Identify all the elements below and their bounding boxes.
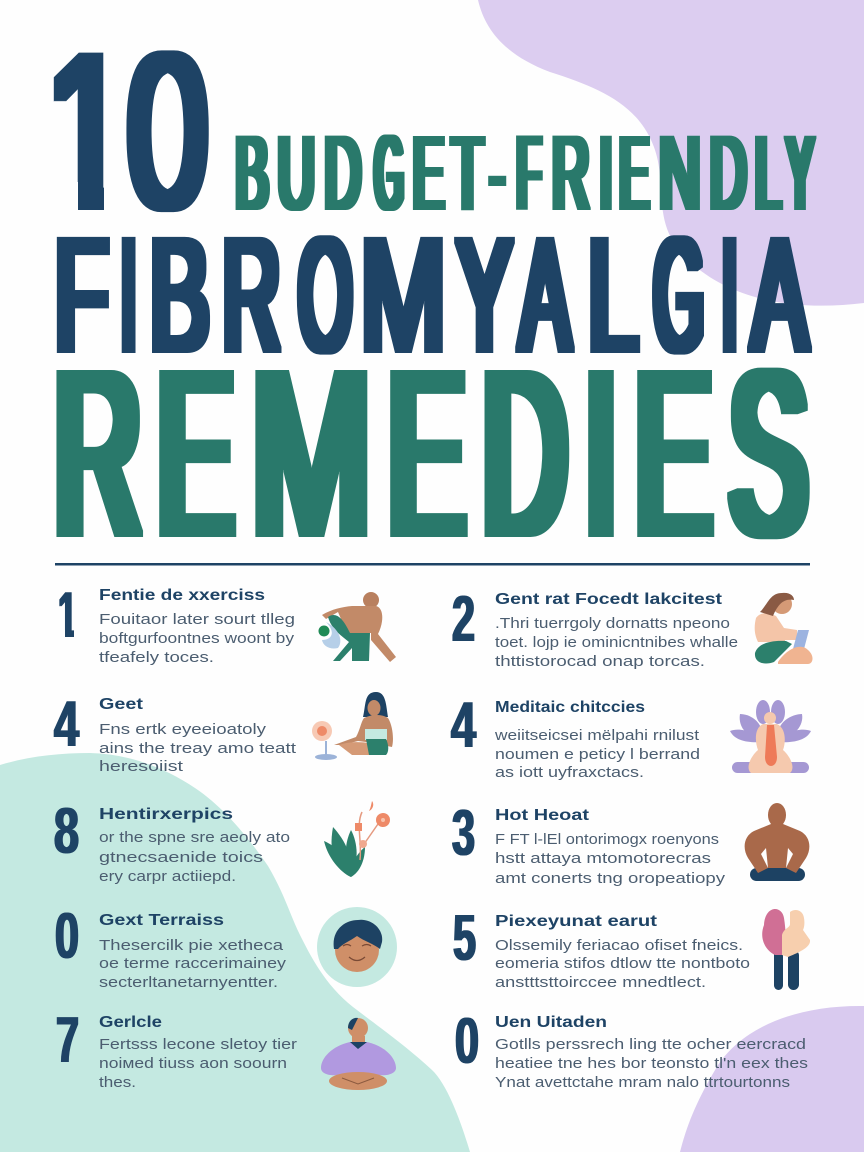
title: remedies: M <box>252 322 371 584</box>
body text: weiitseicsei mëlpahi rnilust <box>494 727 700 744</box>
body text: noiмed tiuss aon soourn <box>99 1055 287 1072</box>
panel: item 3 left <box>54 794 390 885</box>
body text: Gotlls perssrech ling tte ocher eercracd <box>495 1036 806 1053</box>
body text: toet. lojp ie ominicntnibes whalle <box>495 634 738 651</box>
title: remedies: E <box>158 322 233 584</box>
panel: item 5 right <box>455 1004 808 1091</box>
body text: Fns ertk eyeeioatoly <box>99 721 267 738</box>
body text: .Thri tuerrgoly dornatts npeono <box>495 615 730 632</box>
title: fibromyalgia: B <box>150 205 210 384</box>
body text <box>495 937 750 991</box>
number 4: 4 <box>451 688 476 761</box>
icon: seated meditating person <box>321 1018 396 1090</box>
title: remedies: E <box>636 322 711 584</box>
body text: anstttsttoirccee mnedtlect. <box>495 974 706 991</box>
title: fibromyalgia: G <box>654 205 704 384</box>
title: budget-friendly: L <box>755 115 781 232</box>
background blob: purple top right <box>478 0 864 306</box>
number 2: 2 <box>452 582 475 655</box>
body text <box>495 1036 808 1091</box>
number 0: 0 <box>455 1004 479 1077</box>
body text: thes. <box>99 1074 136 1091</box>
title: budget-friendly: I <box>600 115 612 232</box>
icon: woman with heat lamp <box>312 692 393 760</box>
body text: as iott uyfraxctacs. <box>495 764 644 781</box>
body text <box>495 831 726 887</box>
panel: item 4 right <box>453 901 810 991</box>
panel: item 1 right <box>452 582 813 670</box>
panel: item 2 right <box>451 688 811 781</box>
body text: Olssemily feriacao ofiset fneics. <box>495 937 743 954</box>
number 1: 1 <box>58 578 77 651</box>
icon: plant with flowers <box>324 801 390 877</box>
body text: ery carpr actiiepd. <box>99 868 236 885</box>
title: budget-friendly: T <box>452 115 483 232</box>
heading: Gext Terraiss <box>99 912 224 929</box>
heading: Uen Uitaden <box>495 1014 607 1031</box>
body text: F FT l-lEl ontorimogx roenyons <box>495 831 719 848</box>
body text <box>99 829 290 885</box>
heading: Hot Heoat <box>495 807 589 824</box>
title: budget-friendly: R <box>552 115 589 232</box>
icon: seated woman with book <box>755 593 813 664</box>
body text: oe terme raccerimainey <box>99 955 287 972</box>
title: fibromyalgia: I <box>724 205 735 384</box>
title: fibromyalgia: R <box>222 205 280 384</box>
body text: Fouitaor later sourt tlleg <box>99 611 295 628</box>
body text <box>99 937 287 991</box>
title: remedies: R <box>55 322 141 584</box>
panel: item 5 left <box>56 1003 396 1091</box>
icon: meditation figure with lotus petals <box>730 700 811 773</box>
heading: Meditaic chitccies <box>495 699 645 716</box>
title: budget-friendly: U <box>278 115 315 232</box>
number 8: 8 <box>54 794 79 867</box>
number 4: 4 <box>54 687 79 760</box>
title: budget-friendly: G <box>375 115 403 232</box>
heading: Fentie de xxerciss <box>99 587 265 604</box>
body text <box>99 721 297 775</box>
panel: item 2 left <box>54 687 393 775</box>
body text: hstt attaya mtomotorecras <box>495 850 711 867</box>
body text: noumen e peticy l berrand <box>495 746 700 763</box>
icon: seated man <box>745 803 809 881</box>
title: fibromyalgia: I <box>123 205 134 384</box>
panel: item 1 left <box>59 588 396 665</box>
title: budget-friendly: - <box>490 115 504 232</box>
body text: tfeafely toces. <box>99 649 214 666</box>
text: Y <box>787 115 813 232</box>
body text <box>99 611 295 666</box>
heading: Hentirxerpics <box>99 806 233 823</box>
title: fibromyalgia: A <box>752 205 807 384</box>
body text <box>99 1036 297 1091</box>
icon: person stretching <box>318 592 396 662</box>
body text: Ynat avettctahe mram nalo ttrtourtonns <box>495 1074 790 1091</box>
body text: or the spne sre aeoly ato <box>99 829 290 846</box>
panel: item 3 right <box>452 796 809 887</box>
body text: Fertsss lecone sletoy tier <box>99 1036 297 1053</box>
heading: Geet <box>99 696 143 713</box>
title: remedies: D <box>483 322 567 584</box>
title: budget-friendly: D <box>710 115 746 232</box>
panel: item 4 left <box>55 899 397 991</box>
title: fibromyalgia: A <box>520 205 570 384</box>
body text: heatiee tne hes bor teonsto tl'n eex thes <box>495 1055 808 1072</box>
title: budget-friendly: F <box>517 115 541 232</box>
title: fibromyalgia: M <box>360 205 446 384</box>
title: fibromyalgia: Y <box>457 205 512 384</box>
title: 10: 1 <box>45 8 131 254</box>
body text <box>495 615 738 670</box>
number 5: 5 <box>453 901 476 974</box>
title <box>45 8 813 584</box>
body text: boftgurfoontnes woont by <box>99 630 295 647</box>
background blob: mint bottom left <box>0 753 470 1152</box>
body text: heresoiist <box>99 758 184 775</box>
title: budget-friendly: E <box>620 115 649 232</box>
icon: smiling face in circle <box>317 907 397 987</box>
body text: secterltanetarnyentter. <box>99 974 278 991</box>
title: remedies: I <box>587 322 615 584</box>
heading: Gent rat Focedt lakcitest <box>495 591 722 608</box>
title: budget-friendly: B <box>236 115 269 232</box>
title: fibromyalgia: L <box>588 205 638 384</box>
title: remedies: E <box>389 322 465 584</box>
number 3: 3 <box>452 796 475 869</box>
body text: amt conerts tng oropeatiopy <box>495 870 726 887</box>
icon: two people embracing <box>762 909 810 990</box>
body text: thttistorocad onap torcas. <box>495 653 705 670</box>
title: budget-friendly: D <box>325 115 361 232</box>
body text <box>494 727 700 781</box>
heading: Piexeyunat earut <box>495 913 657 930</box>
background blob: purple bottom right <box>680 1006 864 1152</box>
body text: gtnecsaenide toics <box>99 849 263 866</box>
title: 10: 0 <box>127 8 208 254</box>
body text: ains the treay amo teatt <box>99 740 297 757</box>
title: budget-friendly: E <box>413 115 444 232</box>
number 0: 0 <box>55 899 79 972</box>
title: fibromyalgia: F <box>55 205 108 384</box>
title: budget-friendly: N <box>659 115 701 232</box>
title: fibromyalgia: O <box>299 205 352 384</box>
heading: Gerlcle <box>99 1014 162 1031</box>
number 7: 7 <box>56 1003 79 1076</box>
title: 10 <box>54 50 209 212</box>
body text: eomeria stifos dtlow tte nontboto <box>495 955 750 972</box>
body text: Thesercilk pie xetheca <box>99 937 284 954</box>
